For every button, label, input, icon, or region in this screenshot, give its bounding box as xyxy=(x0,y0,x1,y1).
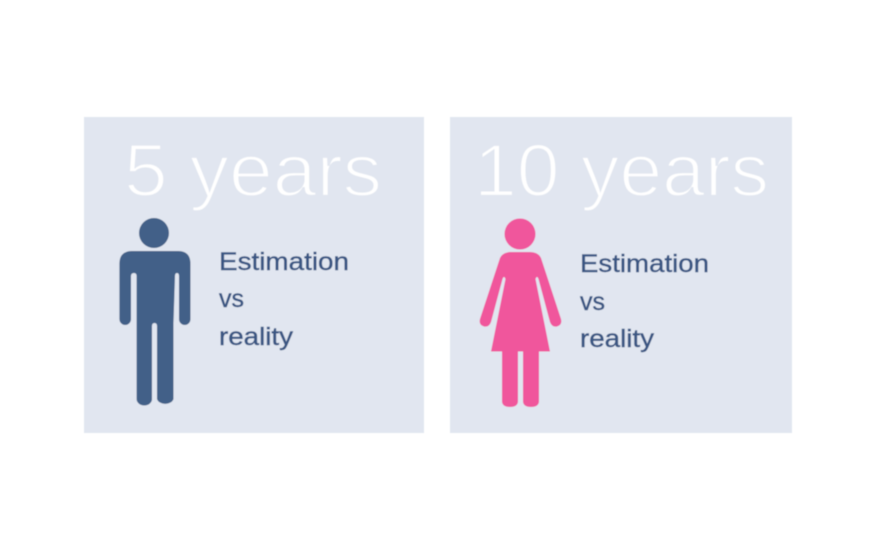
text: estimation vs reality: vs xyxy=(219,285,244,313)
icon: woman xyxy=(480,218,561,407)
text: estimation vs reality xyxy=(580,250,709,353)
panel background xyxy=(450,117,792,433)
text: estimation vs reality: vs xyxy=(580,288,605,316)
text: estimation vs reality: Estimation xyxy=(580,250,709,278)
panel background xyxy=(84,117,424,433)
panel: 5 years xyxy=(84,117,424,433)
text: estimation vs reality: reality xyxy=(580,325,655,353)
text: estimation vs reality xyxy=(219,248,349,351)
text: estimation vs reality: reality xyxy=(219,323,294,351)
panel: 10 years xyxy=(450,117,792,433)
heading: 5 years: 5 years xyxy=(124,129,382,212)
heading: 10 years: 10 years xyxy=(474,129,769,212)
text: estimation vs reality: Estimation xyxy=(219,248,349,276)
icon: man xyxy=(119,218,190,405)
